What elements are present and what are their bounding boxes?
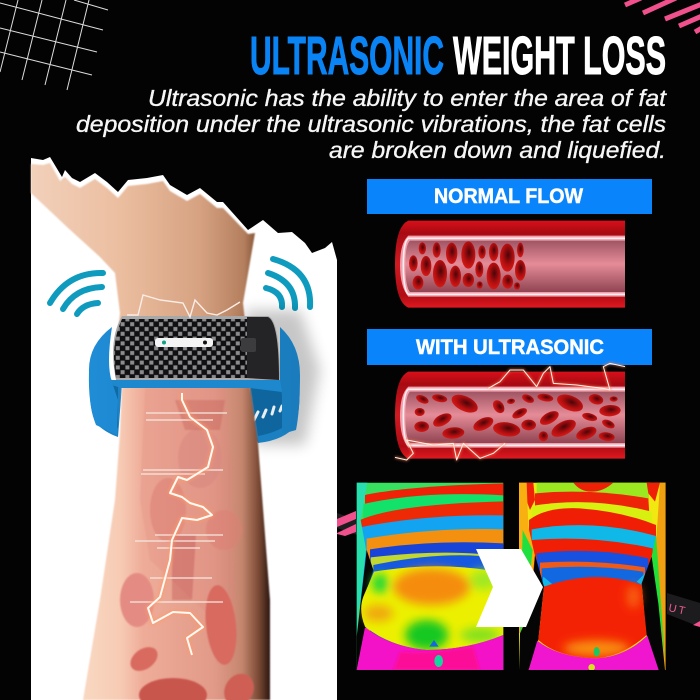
decorative pink stripes top right (625, 0, 700, 32)
subtitle text: are broken down and liquefied. (329, 137, 666, 163)
panel: wrist and armband photo (31, 157, 337, 700)
lightning over vessel (395, 363, 625, 460)
white indicator pill (155, 338, 213, 347)
banner: normal flow: NORMAL FLOW (434, 185, 583, 208)
red blood cells (409, 241, 526, 290)
icon: left wifi waves (50, 273, 103, 314)
decorative tag right with letters (667, 593, 700, 627)
hand skin (31, 163, 255, 330)
decorative pink stripe tag left (337, 511, 357, 536)
banner: normal flow (367, 179, 652, 214)
title: ULTRASONIC (250, 26, 444, 86)
stacked colour bands (365, 483, 504, 544)
armband carbon plate (113, 316, 280, 380)
belly (538, 577, 647, 658)
subtitle text: Ultrasonic has the ability to enter the area of fat (148, 85, 668, 111)
red blood cells (414, 391, 621, 443)
subtitle text (76, 85, 668, 163)
lower body magenta (529, 636, 659, 670)
diagram: ultrasonic vessel (395, 363, 625, 460)
left side strip (357, 483, 367, 637)
belly (361, 566, 503, 650)
forearm (83, 385, 270, 700)
lightning bolt on forearm (148, 393, 213, 655)
lightning bolt at wrist (127, 295, 240, 317)
armband drop shadow (245, 310, 320, 445)
thermal image after (519, 483, 666, 671)
black side (357, 550, 373, 670)
red blood cell overlay on forearm (120, 388, 260, 700)
lower body magenta (357, 627, 503, 670)
icon: right wifi waves (266, 259, 310, 308)
white torn paper panel (31, 157, 337, 700)
subtitle text: deposition under the ultrasonic vibrations, the fat cells (76, 111, 667, 137)
stacked colour bands (535, 492, 650, 511)
thermal image before (357, 483, 503, 670)
ultrasonic vibration lines (130, 413, 227, 602)
side strips (519, 483, 537, 633)
banner: with ultrasonic (367, 329, 652, 365)
decorative grid top left (0, 0, 108, 90)
black sides (519, 555, 544, 670)
armband front strap (89, 327, 300, 435)
banner: with ultrasonic: WITH ULTRASONIC (416, 336, 604, 359)
diagram: normal flow vessel (395, 221, 625, 308)
top neckline (573, 483, 613, 492)
arrow: before to after (476, 549, 543, 627)
decorative tag right with letters: UT (667, 602, 688, 618)
armband rear strap (90, 370, 300, 443)
